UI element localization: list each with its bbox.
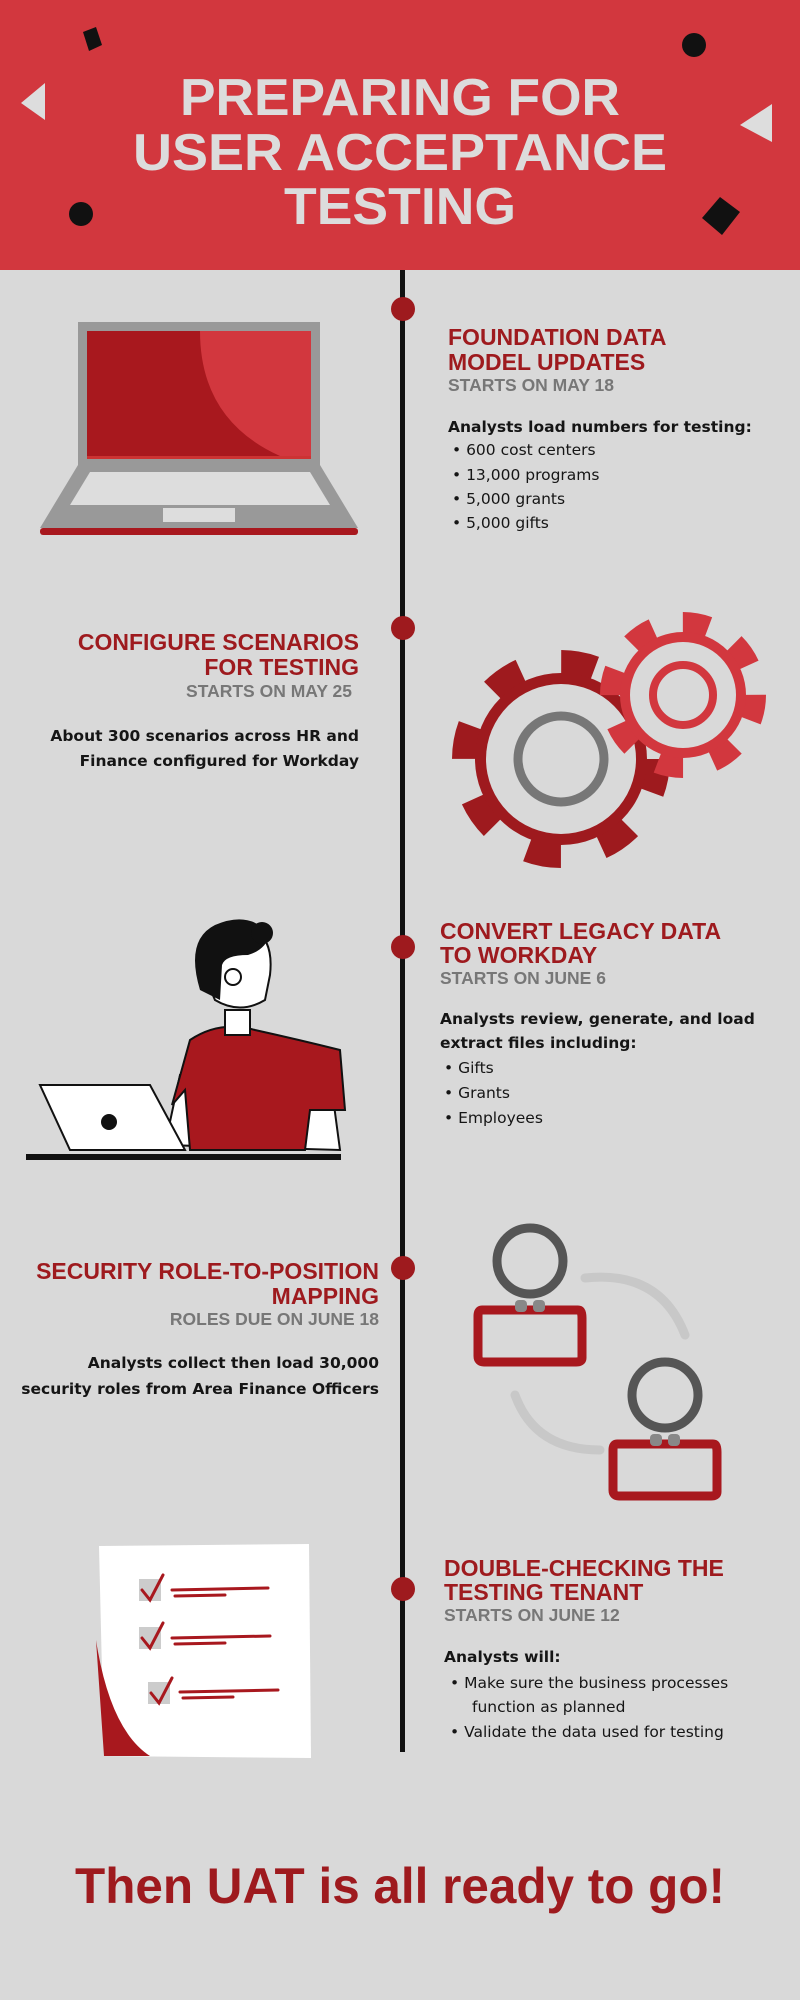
section 2 text: Finance configured for Workday — [80, 752, 359, 770]
section 2 text: CONFIGURE SCENARIOS — [78, 629, 359, 655]
decoration shapes — [21, 27, 772, 235]
header banner — [0, 0, 800, 270]
section 2 text — [50, 629, 359, 770]
section 1 text — [448, 324, 752, 532]
section 4 text: security roles from Area Finance Officers — [21, 1380, 379, 1398]
section 3 text: • Grants — [444, 1084, 510, 1102]
timeline — [391, 270, 415, 1752]
section 2 text: About 300 scenarios across HR and — [50, 727, 359, 745]
section 4 text: MAPPING — [272, 1283, 379, 1309]
section 4 text: SECURITY ROLE-TO-POSITION — [36, 1258, 379, 1284]
section 1 text: • 5,000 gifts — [452, 514, 549, 532]
section 3 text: TO WORKDAY — [440, 942, 597, 968]
section 1 text: • 13,000 programs — [452, 466, 599, 484]
section 1 text: STARTS ON MAY 18 — [448, 375, 614, 395]
section 5 text: Analysts will: — [444, 1648, 561, 1666]
section 1 text: Analysts load numbers for testing: — [448, 418, 752, 436]
section 1 text: • 600 cost centers — [452, 441, 596, 459]
title — [133, 69, 667, 236]
icon: checklist — [96, 1544, 311, 1758]
section 4 text: Analysts collect then load 30,000 — [88, 1354, 379, 1372]
section 3 text: • Gifts — [444, 1059, 494, 1077]
section 5 text: DOUBLE-CHECKING THE — [444, 1555, 724, 1581]
icon: gears — [465, 623, 755, 855]
section 2 text: FOR TESTING — [204, 654, 359, 680]
section 3 text: Analysts review, generate, and load — [440, 1010, 755, 1028]
section 5 text: • Make sure the business processes — [450, 1674, 728, 1692]
section 1 text: FOUNDATION DATA — [448, 324, 666, 350]
section 4 text — [21, 1258, 379, 1398]
section 2 text: STARTS ON MAY 25 — [186, 681, 352, 701]
section 4 text: ROLES DUE ON JUNE 18 — [170, 1309, 379, 1329]
icon: laptop — [40, 322, 358, 535]
section 3 text: STARTS ON JUNE 6 — [440, 968, 606, 988]
closing message: Then UAT is all ready to go! — [75, 1858, 725, 1914]
title: TESTING — [284, 178, 516, 236]
icon: people exchange — [478, 1228, 717, 1496]
section 1 text: • 5,000 grants — [452, 490, 565, 508]
section 5 text: TESTING TENANT — [444, 1579, 643, 1605]
icon: woman at laptop — [26, 919, 345, 1160]
title: PREPARING FOR — [180, 69, 620, 127]
section 1 text: MODEL UPDATES — [448, 349, 645, 375]
section 3 text: extract files including: — [440, 1034, 637, 1052]
section 3 text: CONVERT LEGACY DATA — [440, 918, 721, 944]
section 5 text — [444, 1555, 728, 1741]
title: USER ACCEPTANCE — [133, 124, 667, 182]
section 5 text: • Validate the data used for testing — [450, 1723, 724, 1741]
section 5 text: STARTS ON JUNE 12 — [444, 1605, 620, 1625]
section 3 text: • Employees — [444, 1109, 543, 1127]
section 3 text — [440, 918, 755, 1127]
section 5 text: function as planned — [472, 1698, 625, 1716]
